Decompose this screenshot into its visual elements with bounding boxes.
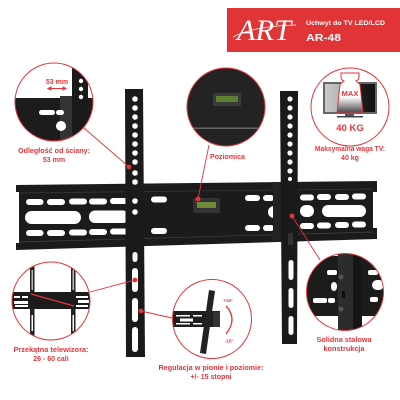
caption: diagonal <box>14 347 88 363</box>
panel: max load <box>311 68 389 146</box>
tilt arrow <box>226 306 232 334</box>
panel: diagonal <box>12 262 90 340</box>
caption: diagonal: 26 - 60 cali <box>33 356 69 363</box>
caption: steel construction: konstrukcja <box>324 346 365 353</box>
panel: tilt adjustment <box>172 280 252 358</box>
label: plus 15 degrees: +15° <box>223 298 233 303</box>
panel: steel construction <box>305 252 385 332</box>
product type: Uchwyt do TV LED/LCD <box>306 21 386 27</box>
right rail <box>273 91 298 344</box>
caption: tilt adjustment: +/- 15 stopni <box>190 374 232 381</box>
label: minus 15 degrees: -15° <box>225 338 233 344</box>
header banner <box>227 8 400 52</box>
caption: steel construction <box>316 337 372 353</box>
panel: wall distance <box>14 60 94 144</box>
caption: tilt adjustment <box>158 365 264 381</box>
callout lines and dots <box>84 128 320 318</box>
model number: AR-48 <box>306 32 341 44</box>
icon: weight: MAX <box>342 89 358 98</box>
bubble level <box>193 198 220 213</box>
weight label: 40 KG <box>336 123 364 134</box>
dimension label: 53 mm <box>46 79 68 86</box>
panel: level <box>186 66 266 148</box>
caption: max load: Maksymalna waga TV: <box>315 146 385 153</box>
caption: level: Poziomica <box>210 154 245 161</box>
bracket arm <box>213 312 220 327</box>
caption: wall distance <box>18 148 90 164</box>
icon: TV <box>323 82 377 118</box>
caption: max load: 40 kg <box>341 155 359 162</box>
left rail <box>125 89 145 357</box>
caption: wall distance: Odległość od ściany: <box>18 148 90 155</box>
logo: ART: ART <box>235 14 293 47</box>
caption: max load <box>315 146 385 162</box>
caption: wall distance: 53 mm <box>43 157 65 164</box>
caption: tilt adjustment: Regulacja w pionie i poziomie: <box>158 365 264 372</box>
TV mount product <box>16 89 377 357</box>
caption: diagonal: Przekątna telewizora: <box>14 347 88 354</box>
dimension arrow <box>48 87 66 90</box>
horizontal bracket <box>16 181 377 250</box>
caption: steel construction: Solidna stalowa <box>316 337 372 344</box>
